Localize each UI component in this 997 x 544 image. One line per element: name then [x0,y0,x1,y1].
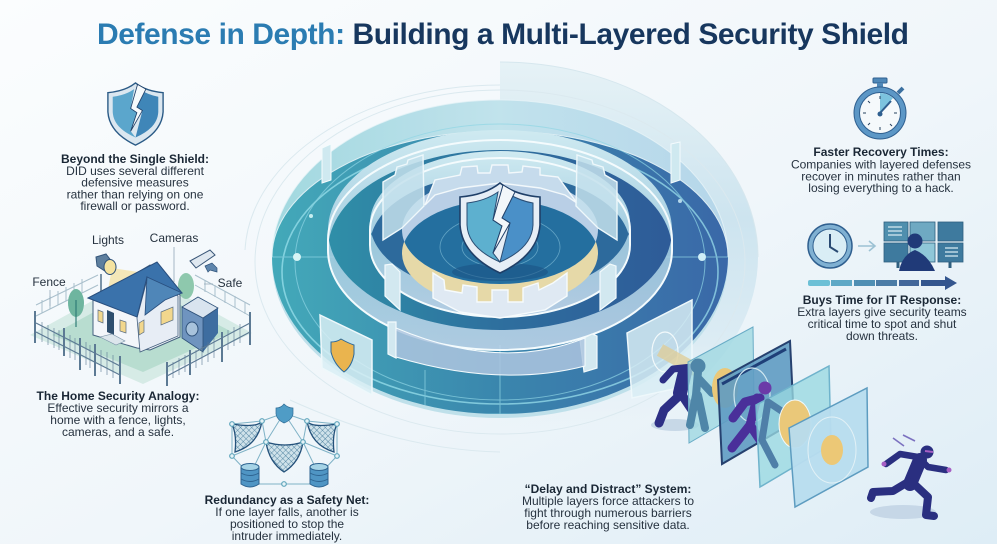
text: buys time: down threats. [846,329,918,343]
text: home security analogy: cameras, and a safe. [62,425,174,439]
home labels [32,231,243,290]
home labels: Fence [32,275,66,289]
outer disc [272,100,728,418]
text: faster recovery: recover in minutes rather than [801,170,961,184]
panel with gold shield [320,315,372,395]
text: redundancy: If one layer falls, another is [215,505,359,519]
wall ring 1 with gold edge [402,184,598,302]
text: delay and distract: before reaching sensitive data. [526,518,690,532]
text: faster recovery: losing everything to a hack. [808,181,954,195]
text: home security analogy: Effective security mirrors a [47,401,189,415]
home labels: Lights [92,233,124,247]
back battlements [425,165,577,205]
front battlements [433,273,567,318]
icon: stopwatch [854,78,906,139]
front fence [35,311,250,386]
arrow: clock to monitors [858,241,875,251]
glass pane 3 dark [718,341,794,464]
text: beyond the single shield: DID uses several different [66,164,205,178]
side battlements [383,155,617,240]
text: buys time: Buys Time for IT Response: [803,293,961,307]
text: beyond the single shield: rather than relying on one [67,188,204,202]
light [96,254,116,300]
faint outer rings [245,62,758,452]
attacker 1 [659,367,692,423]
wall ring 2 [370,151,630,317]
text: buys time: critical time to spot and shut [808,317,957,331]
shadow 1 [651,419,699,431]
text: home security analogy: The Home Security Analogy: [37,389,199,403]
text: buys time: Extra layers give security teams [797,305,967,319]
glass pane 1 [627,300,700,398]
house [88,262,182,352]
icon: security operations monitors [884,222,963,271]
text: faster recovery: Faster Recovery Times: [813,145,949,159]
camera [190,250,217,272]
icon: clock [808,224,852,268]
illustration: home security [30,231,252,386]
central broken shield [460,183,540,273]
back fence [36,275,250,316]
side front towers [385,264,616,372]
safe [182,297,218,352]
text: redundancy: intruder immediately. [232,529,342,543]
text: delay and distract: Multiple layers force attackers to [522,494,694,508]
text: faster recovery: Companies with layered defenses [791,158,971,172]
text: beyond the single shield: defensive measures [81,176,189,190]
label leaders [50,247,213,306]
glass pane 5 [789,388,868,507]
central layered defense diagram [245,62,758,452]
timeline arrow [808,276,957,290]
icon: broken shield [108,83,163,145]
text: delay and distract: fight through numerous barriers [524,506,692,520]
glass pane 2 [688,327,754,443]
running attacker [870,435,952,519]
home labels: Cameras [150,231,198,245]
text: beyond the single shield: Beyond the Single Shield: [61,152,209,166]
home labels: Safe [218,276,243,290]
text: redundancy: Redundancy as a Safety Net: [205,493,369,507]
text: delay and distract: “Delay and Distract” System: [525,482,691,496]
text: home security analogy: home with a fence, lights, [50,413,186,427]
light beam [108,268,138,290]
text: redundancy: positioned to stop the [230,517,344,531]
glass pane 4 [756,366,831,487]
icon: redundancy network [230,404,339,487]
front glass wall [396,328,585,375]
outer wall posts [322,142,680,183]
wall ring 3 [328,130,672,350]
tree [68,289,84,317]
text: beyond the single shield: firewall or password. [80,199,190,213]
title: Defense in Depth: Building a Multi-Layered Security Shield [97,18,909,51]
illustration: attacker passing glass layers [627,300,952,519]
ground [30,273,252,384]
gold shield [331,339,354,372]
